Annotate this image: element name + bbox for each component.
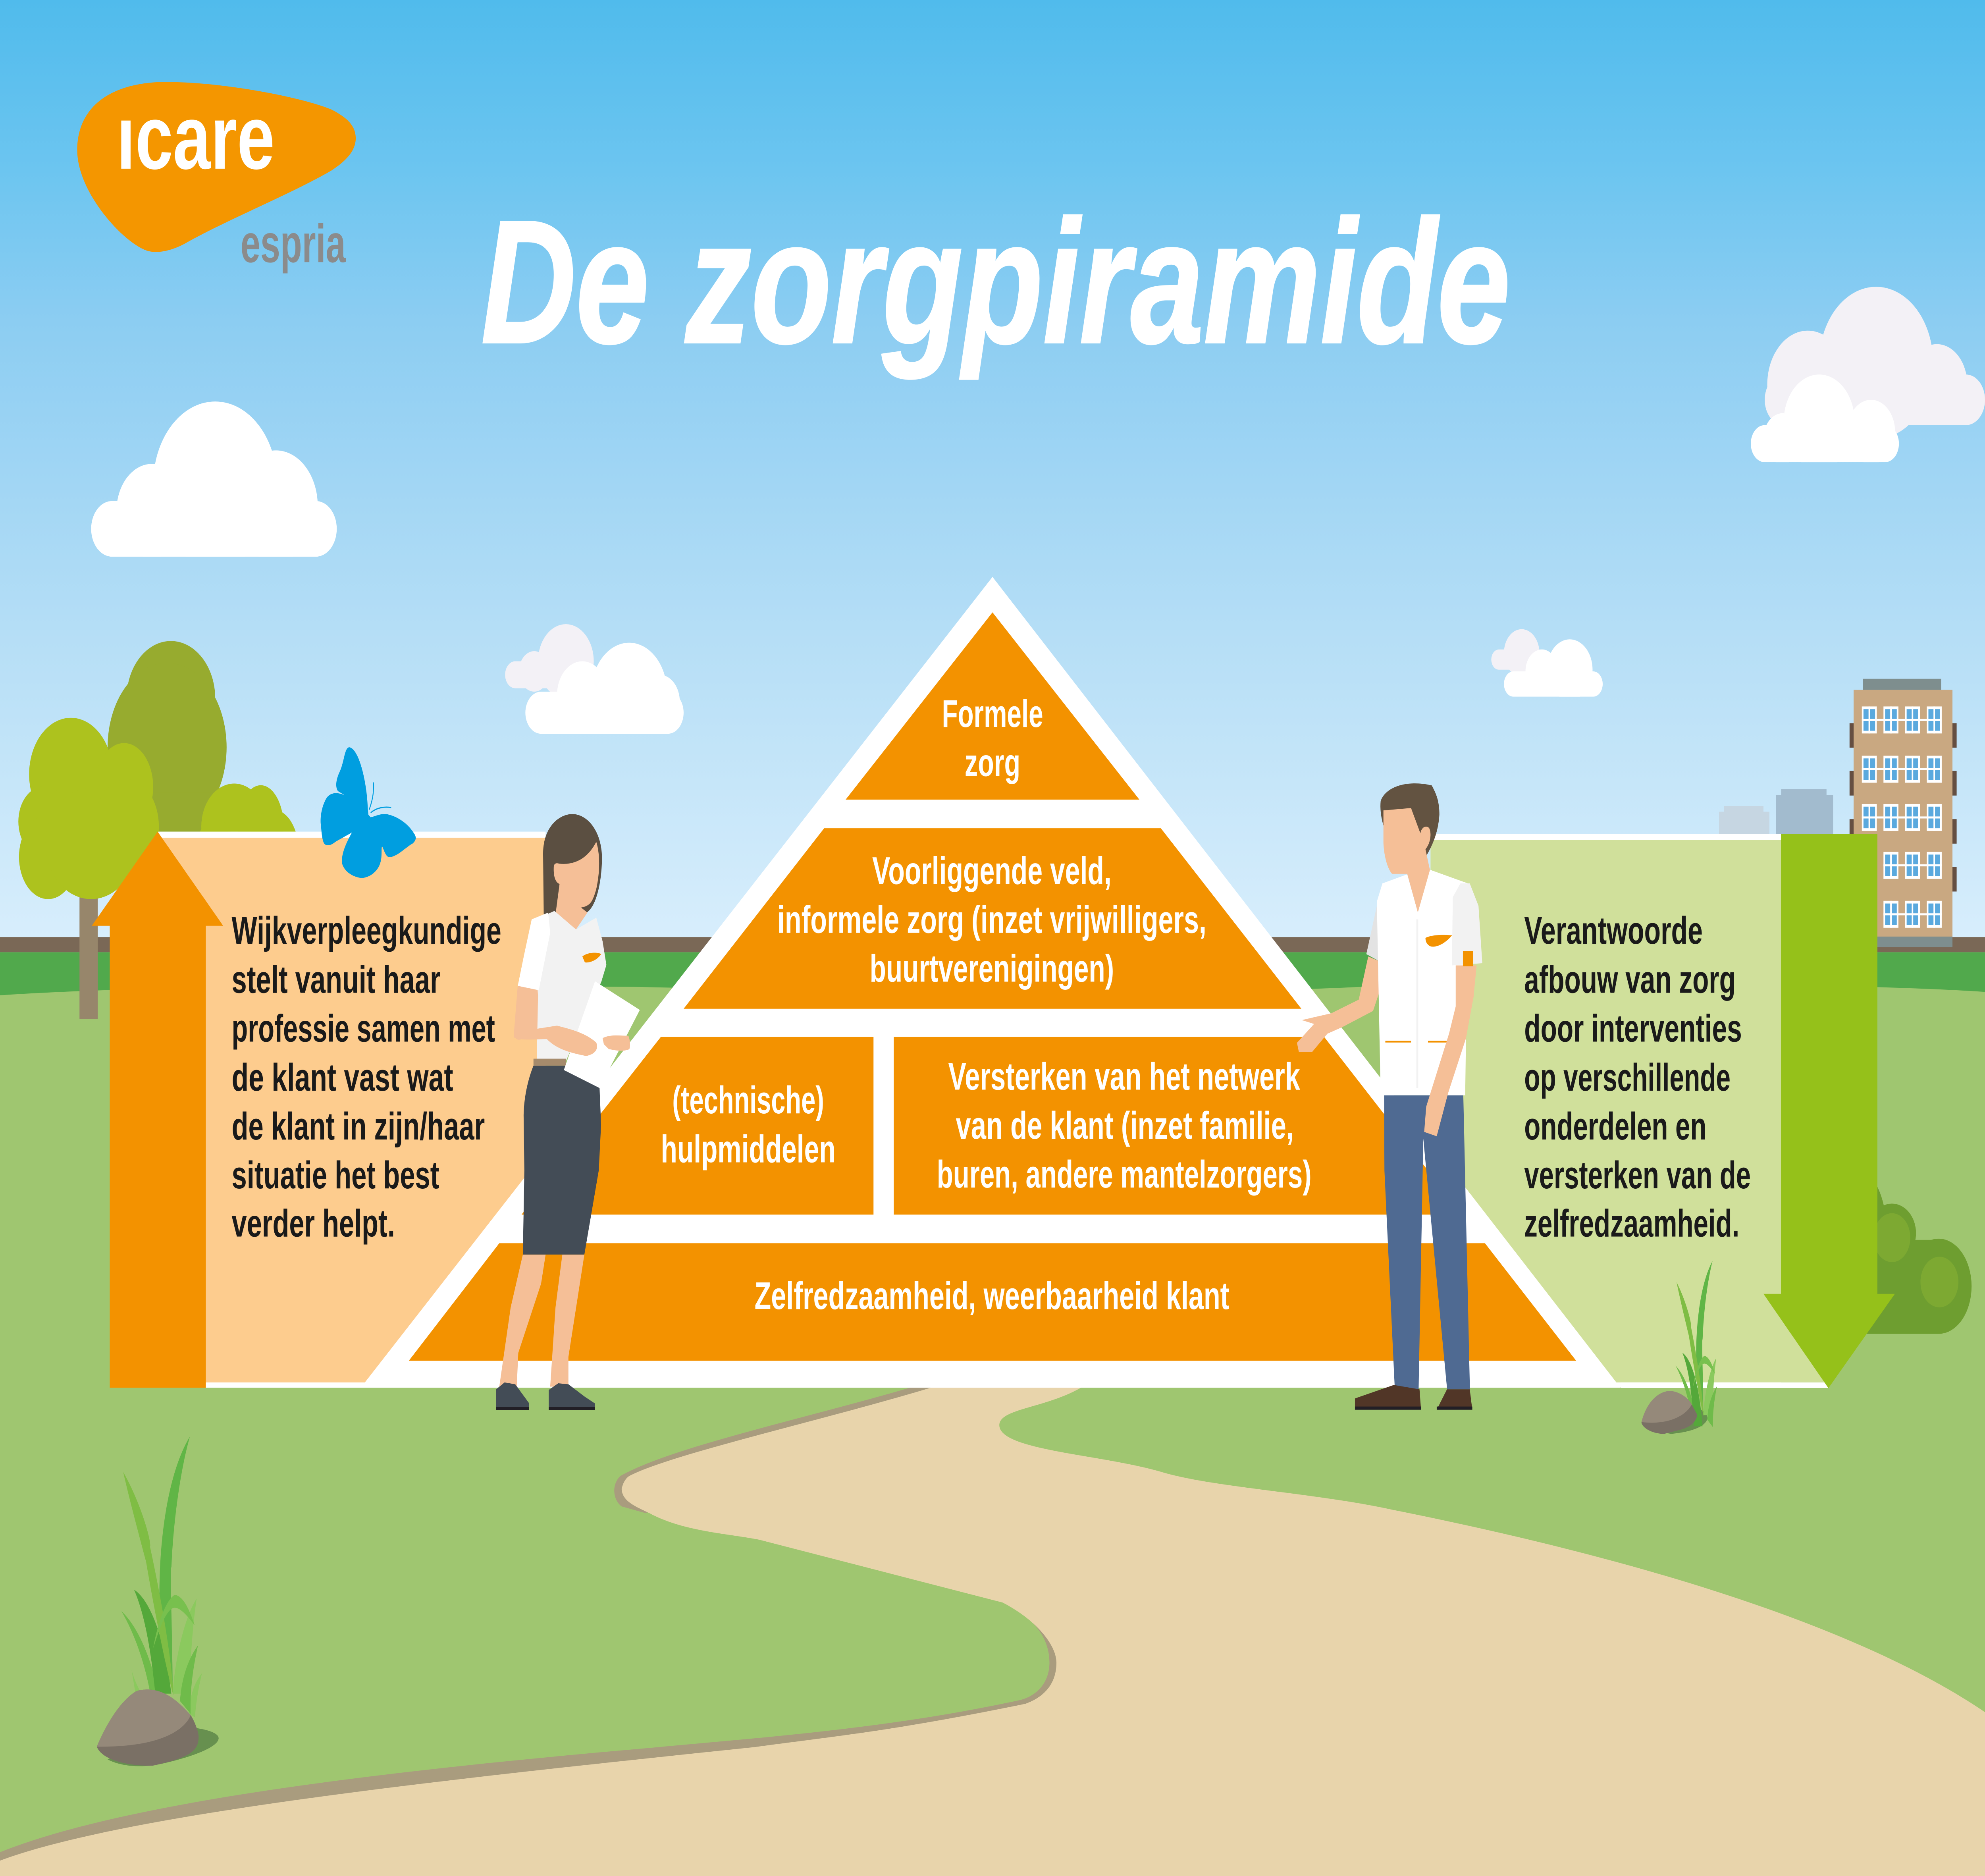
text: right panel: onderdelen en bbox=[1524, 1105, 1706, 1148]
woman hair bbox=[543, 814, 602, 914]
rock shadow bbox=[1652, 1407, 1707, 1434]
woman badge bbox=[582, 953, 601, 962]
pyramid bbox=[361, 577, 1621, 1388]
grass blades bbox=[121, 1436, 202, 1717]
text: left panel: de klant vast wat bbox=[232, 1056, 453, 1099]
text: right panel: versterken van de bbox=[1524, 1154, 1751, 1197]
woman face bbox=[554, 842, 599, 929]
white base line left bbox=[205, 1382, 370, 1388]
text: left panel: situatie het best bbox=[232, 1154, 439, 1197]
man zip bbox=[1416, 920, 1418, 1088]
plant: left grass with rock bbox=[97, 1436, 219, 1766]
icon: butterfly bbox=[321, 747, 416, 878]
logo: Icare Espria bbox=[77, 82, 356, 252]
woman shoes bbox=[496, 1382, 595, 1410]
tree crown: light bbox=[18, 718, 159, 899]
bush bbox=[196, 784, 299, 894]
tier: formele zorg: zorg bbox=[965, 741, 1020, 785]
rock bbox=[97, 1689, 198, 1766]
pyramid outline bbox=[361, 577, 1621, 1388]
man arm pointing bbox=[1297, 956, 1379, 1052]
man trousers bbox=[1384, 1095, 1470, 1389]
background: sky bbox=[0, 0, 1985, 945]
tier: netwerk: van de klant (inzet familie, bbox=[956, 1104, 1294, 1147]
ground: horizon bands bbox=[0, 937, 1985, 1003]
man face bbox=[1384, 808, 1430, 913]
rock shadow bbox=[108, 1726, 219, 1766]
woman shirt bbox=[532, 911, 606, 1061]
figure: woman nurse bbox=[496, 814, 640, 1410]
text: right panel: op verschillende bbox=[1524, 1056, 1731, 1099]
man right arm bbox=[1424, 966, 1476, 1136]
text: left panel: stelt vanuit haar bbox=[232, 958, 441, 1001]
tier: netwerk: Versterken van het netwerk bbox=[948, 1055, 1301, 1098]
cloud: top right bbox=[1751, 287, 1985, 469]
man right sleeve bbox=[1452, 883, 1482, 966]
woman legs bbox=[499, 1255, 584, 1386]
trees bbox=[18, 641, 299, 1019]
tree trunk bbox=[79, 886, 98, 1019]
tier: hulpmiddelen: hulpmiddelen bbox=[661, 1128, 836, 1171]
right bush bbox=[1835, 1172, 1972, 1334]
arrow: up orange bbox=[92, 832, 223, 1388]
tier: voorliggende veld: Voorliggende veld, bbox=[872, 849, 1112, 893]
paper bbox=[564, 981, 640, 1088]
woman arm back bbox=[514, 985, 538, 1040]
tier: zelfredzaamheid: Zelfredzaamheid, weerbaarheid klant bbox=[755, 1274, 1229, 1317]
woman forearm bbox=[514, 1026, 597, 1056]
tier: voorliggende veld: buurtverenigingen) bbox=[870, 947, 1114, 990]
text: right panel: zelfredzaamheid. bbox=[1524, 1202, 1739, 1245]
man shoes bbox=[1355, 1385, 1472, 1410]
man left sleeve bbox=[1366, 906, 1379, 961]
text: left panel: de klant in zijn/haar bbox=[232, 1105, 485, 1148]
arrow: down green bbox=[1763, 834, 1895, 1388]
woman sleeve bbox=[518, 913, 550, 990]
tier: zelfredzaamheid bbox=[409, 1243, 1576, 1361]
path bbox=[0, 1388, 1985, 1876]
man arm band bbox=[1463, 951, 1473, 966]
far buildings bbox=[1719, 789, 1833, 835]
cloud: middle right bbox=[1491, 629, 1603, 700]
logo word: icare: ıcare bbox=[116, 86, 275, 188]
tier: formele zorg: Formele bbox=[942, 692, 1043, 736]
man hair bbox=[1380, 783, 1440, 856]
text: right panel: door interventies bbox=[1524, 1007, 1742, 1050]
man pockets bbox=[1385, 1041, 1448, 1043]
plant: right grass with rock bbox=[1642, 1261, 1717, 1434]
text: left panel: Wijkverpleegkundige bbox=[232, 909, 501, 952]
woman hand bbox=[603, 1035, 630, 1051]
text: left panel bbox=[232, 909, 501, 1245]
panel: peach text panel bbox=[158, 832, 545, 1386]
cloud: middle left bbox=[505, 624, 684, 744]
text: right panel: afbouw van zorg bbox=[1524, 958, 1736, 1001]
logo word: espria: espria bbox=[241, 214, 346, 274]
tier: hulpmiddelen bbox=[522, 1037, 873, 1215]
cloud: left bbox=[91, 401, 337, 567]
apartment building bbox=[1850, 679, 1957, 947]
grass blades bbox=[1676, 1261, 1717, 1427]
tier: hulpmiddelen: (technische) bbox=[672, 1079, 824, 1122]
man badge bbox=[1426, 935, 1452, 947]
figure: man nurse bbox=[1297, 783, 1482, 1410]
panel: green text panel bbox=[1430, 834, 1828, 1388]
ground: grass field bbox=[0, 984, 1985, 1876]
tier: formele zorg bbox=[846, 612, 1139, 800]
text: right panel: Verantwoorde bbox=[1524, 909, 1703, 952]
tier: netwerk: buren, andere mantelzorgers) bbox=[937, 1153, 1312, 1196]
text: left panel: verder helpt. bbox=[232, 1202, 395, 1245]
tier: voorliggende veld bbox=[684, 828, 1301, 1009]
tier: netwerk bbox=[894, 1037, 1462, 1215]
tier: voorliggende veld: informele zorg (inzet vrijwilligers, bbox=[777, 898, 1206, 941]
woman skirt bbox=[523, 1066, 601, 1255]
rock bbox=[1642, 1391, 1697, 1434]
text: right panel bbox=[1524, 909, 1751, 1245]
man shirt bbox=[1377, 870, 1468, 1095]
text: left panel: professie samen met bbox=[232, 1007, 495, 1050]
woman belt bbox=[534, 1059, 566, 1066]
title: De zorgpiramide bbox=[481, 183, 1510, 381]
